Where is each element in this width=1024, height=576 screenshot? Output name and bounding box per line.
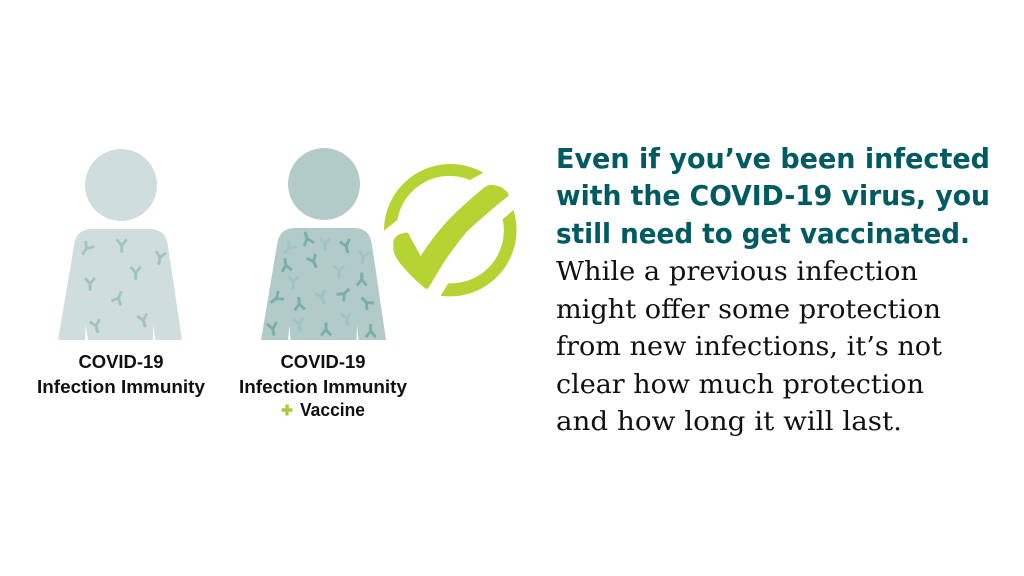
heading: Even if you’ve been infected	[556, 142, 990, 175]
body	[261, 228, 386, 340]
antibodies	[267, 230, 376, 337]
head	[85, 149, 157, 221]
figure: person with infection immunity plus vaccine	[261, 148, 386, 340]
label: infection immunity: Infection Immunity	[37, 377, 205, 397]
label: infection immunity plus vaccine: Infection Immunity	[239, 377, 407, 397]
body	[58, 229, 182, 340]
body text: from new infections, it’s not	[556, 332, 943, 362]
body text	[556, 257, 943, 437]
body text: and how long it will last.	[556, 407, 902, 437]
body text: While a previous infection	[556, 257, 918, 287]
head	[288, 148, 360, 220]
label: infection immunity plus vaccine: COVID-19	[280, 352, 366, 372]
label: infection immunity plus vaccine	[239, 352, 407, 420]
heading: with the COVID-19 virus, you	[556, 179, 990, 212]
label: infection immunity plus vaccine: Vaccine	[300, 400, 365, 420]
antibodies	[78, 240, 166, 334]
label: infection immunity: COVID-19	[78, 352, 164, 372]
icon: green check mark in ring	[384, 164, 517, 296]
heading	[556, 142, 990, 250]
figure: person with infection immunity	[58, 149, 182, 340]
heading: still need to get vaccinated.	[556, 217, 970, 250]
body text: might offer some protection	[556, 295, 941, 325]
body text: clear how much protection	[556, 370, 924, 400]
label: infection immunity	[37, 352, 205, 397]
